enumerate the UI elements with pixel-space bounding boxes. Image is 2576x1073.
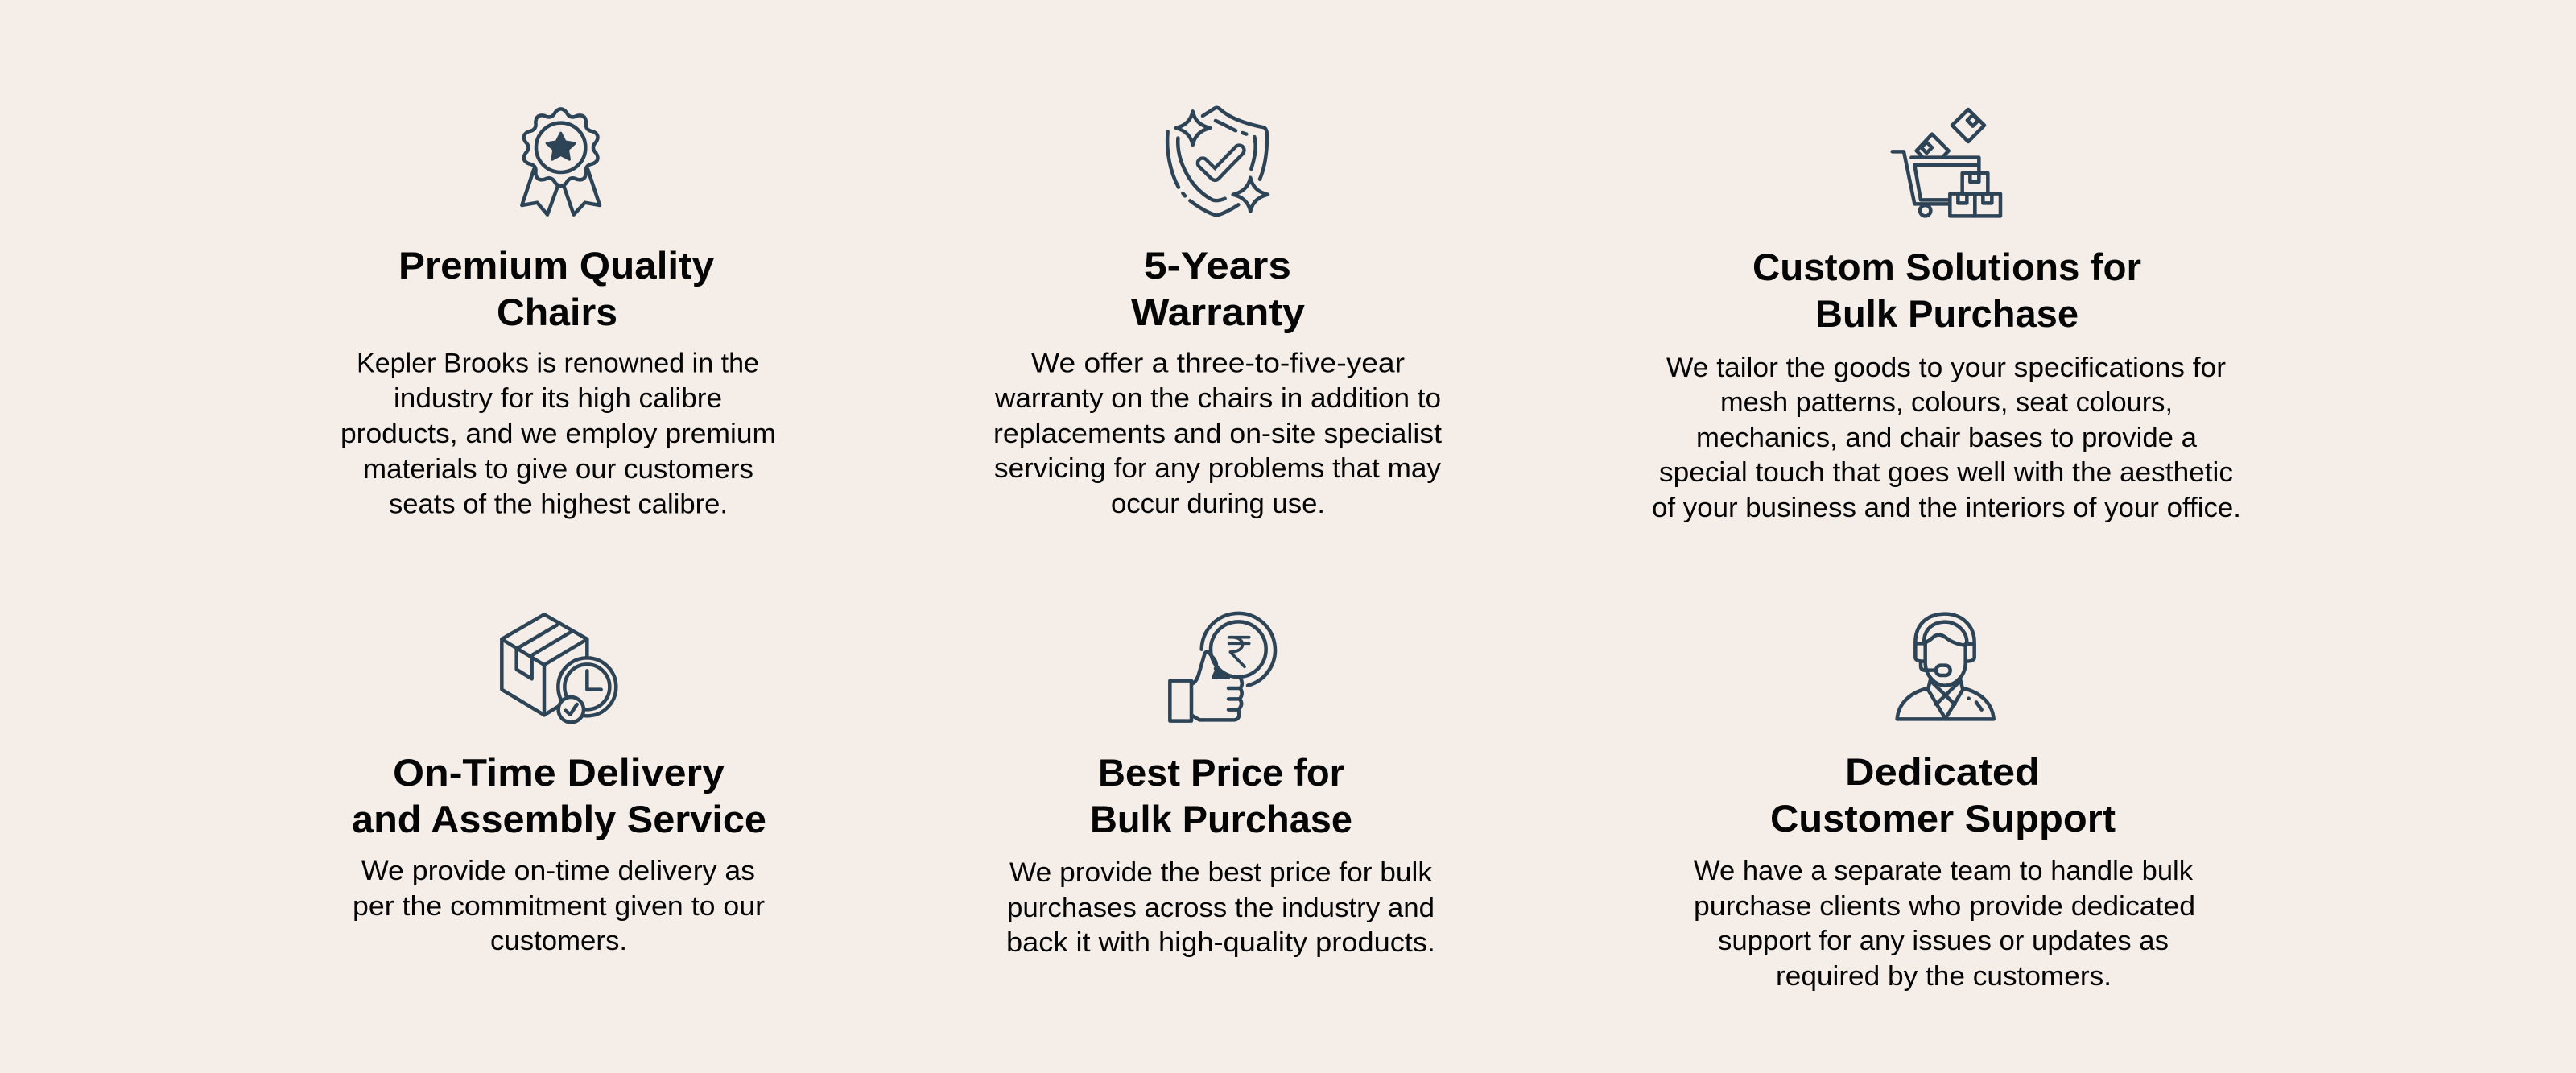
text block: warranty description: warranty on the chairs in addition to — [994, 383, 1441, 414]
text block: premium quality description: Kepler Brooks is renowned in the — [357, 348, 759, 378]
icon: parcel with clock and check — [502, 614, 616, 722]
panel: best price for bulk purchase — [1006, 613, 1435, 958]
text block: delivery description: We provide on-time delivery as — [361, 856, 755, 886]
text block: premium quality description: materials to give our customers — [363, 454, 753, 485]
text block: premium quality description: industry for its high calibre — [394, 383, 722, 414]
text block: best price description: purchases across the industry and — [1007, 893, 1435, 923]
heading: Premium Quality Chairs: Premium Quality — [398, 244, 714, 287]
text block: best price description: back it with high-quality products. — [1006, 927, 1435, 958]
text block: premium quality description — [341, 348, 776, 520]
text block: customer support description: support for any issues or updates as — [1718, 926, 2169, 956]
text block: custom solutions description: special touch that goes well with the aesthetic — [1659, 457, 2233, 488]
heading: Premium Quality Chairs: Chairs — [497, 291, 617, 333]
text block: customer support description — [1694, 856, 2195, 992]
text block: warranty description: servicing for any problems that may — [994, 453, 1441, 484]
text block: custom solutions description: We tailor the goods to your specifications for — [1666, 353, 2226, 383]
text block: custom solutions description: of your business and the interiors of your office. — [1652, 493, 2241, 523]
panel: premium quality chairs — [341, 109, 776, 520]
text block: warranty description: occur during use. — [1111, 489, 1325, 519]
panel: 5-years warranty — [993, 108, 1443, 519]
heading: Dedicated Customer Support: Customer Support — [1770, 797, 2116, 840]
heading: Premium Quality Chairs — [398, 244, 714, 333]
heading: Custom Solutions for Bulk Purchase: Custom Solutions for — [1752, 246, 2141, 288]
text block: customer support description: We have a separate team to handle bulk — [1694, 856, 2194, 886]
text block: premium quality description: seats of the highest calibre. — [389, 489, 728, 520]
icon: thumbs up with rupee coin — [1170, 613, 1275, 721]
text block: custom solutions description: mechanics, and chair bases to provide a — [1696, 423, 2197, 453]
heading: 5-Years Warranty — [1131, 244, 1305, 333]
icon: award rosette with star — [522, 109, 600, 215]
text block: delivery description — [353, 856, 765, 956]
text block: warranty description: We offer a three-to-five-year — [1031, 348, 1405, 378]
heading: On-Time Delivery and Assembly Service: On-Time Delivery — [393, 751, 724, 794]
text block: customer support description: required by the customers. — [1776, 961, 2112, 992]
heading: Best Price for Bulk Purchase: Best Price for — [1098, 751, 1344, 794]
panel: on-time delivery and assembly service — [352, 614, 766, 956]
heading: Dedicated Customer Support — [1770, 750, 2116, 840]
heading: Best Price for Bulk Purchase — [1090, 751, 1352, 840]
heading: Custom Solutions for Bulk Purchase: Bulk Purchase — [1815, 292, 2079, 335]
text block: best price description: We provide the best price for bulk — [1009, 857, 1433, 888]
heading: Dedicated Customer Support: Dedicated — [1845, 750, 2040, 793]
text block: delivery description: customers. — [490, 926, 627, 956]
heading: 5-Years Warranty: Warranty — [1131, 291, 1305, 333]
text block: warranty description — [993, 348, 1443, 519]
panel: dedicated customer support — [1694, 614, 2195, 992]
heading: On-Time Delivery and Assembly Service: and Assembly Service — [352, 798, 766, 840]
heading: On-Time Delivery and Assembly Service — [352, 751, 766, 840]
text block: premium quality description: products, and we employ premium — [341, 419, 776, 449]
text block: custom solutions description: mesh patterns, colours, seat colours, — [1720, 387, 2173, 418]
icon: shopping cart with boxes — [1893, 109, 2000, 216]
text block: delivery description: per the commitment given to our — [353, 891, 765, 922]
panel: custom solutions for bulk purchase — [1652, 109, 2241, 523]
heading: Best Price for Bulk Purchase: Bulk Purchase — [1090, 798, 1352, 840]
text block: customer support description: purchase clients who provide dedicated — [1694, 891, 2195, 922]
text block: warranty description: replacements and on-site specialist — [993, 419, 1443, 449]
heading: 5-Years Warranty: 5-Years — [1144, 244, 1291, 287]
text block: best price description — [1006, 857, 1435, 958]
heading: Custom Solutions for Bulk Purchase — [1752, 246, 2141, 335]
text block: custom solutions description — [1652, 353, 2241, 523]
icon: shield with check and sparkles — [1167, 108, 1268, 216]
icon: support agent with headset — [1897, 614, 1994, 719]
